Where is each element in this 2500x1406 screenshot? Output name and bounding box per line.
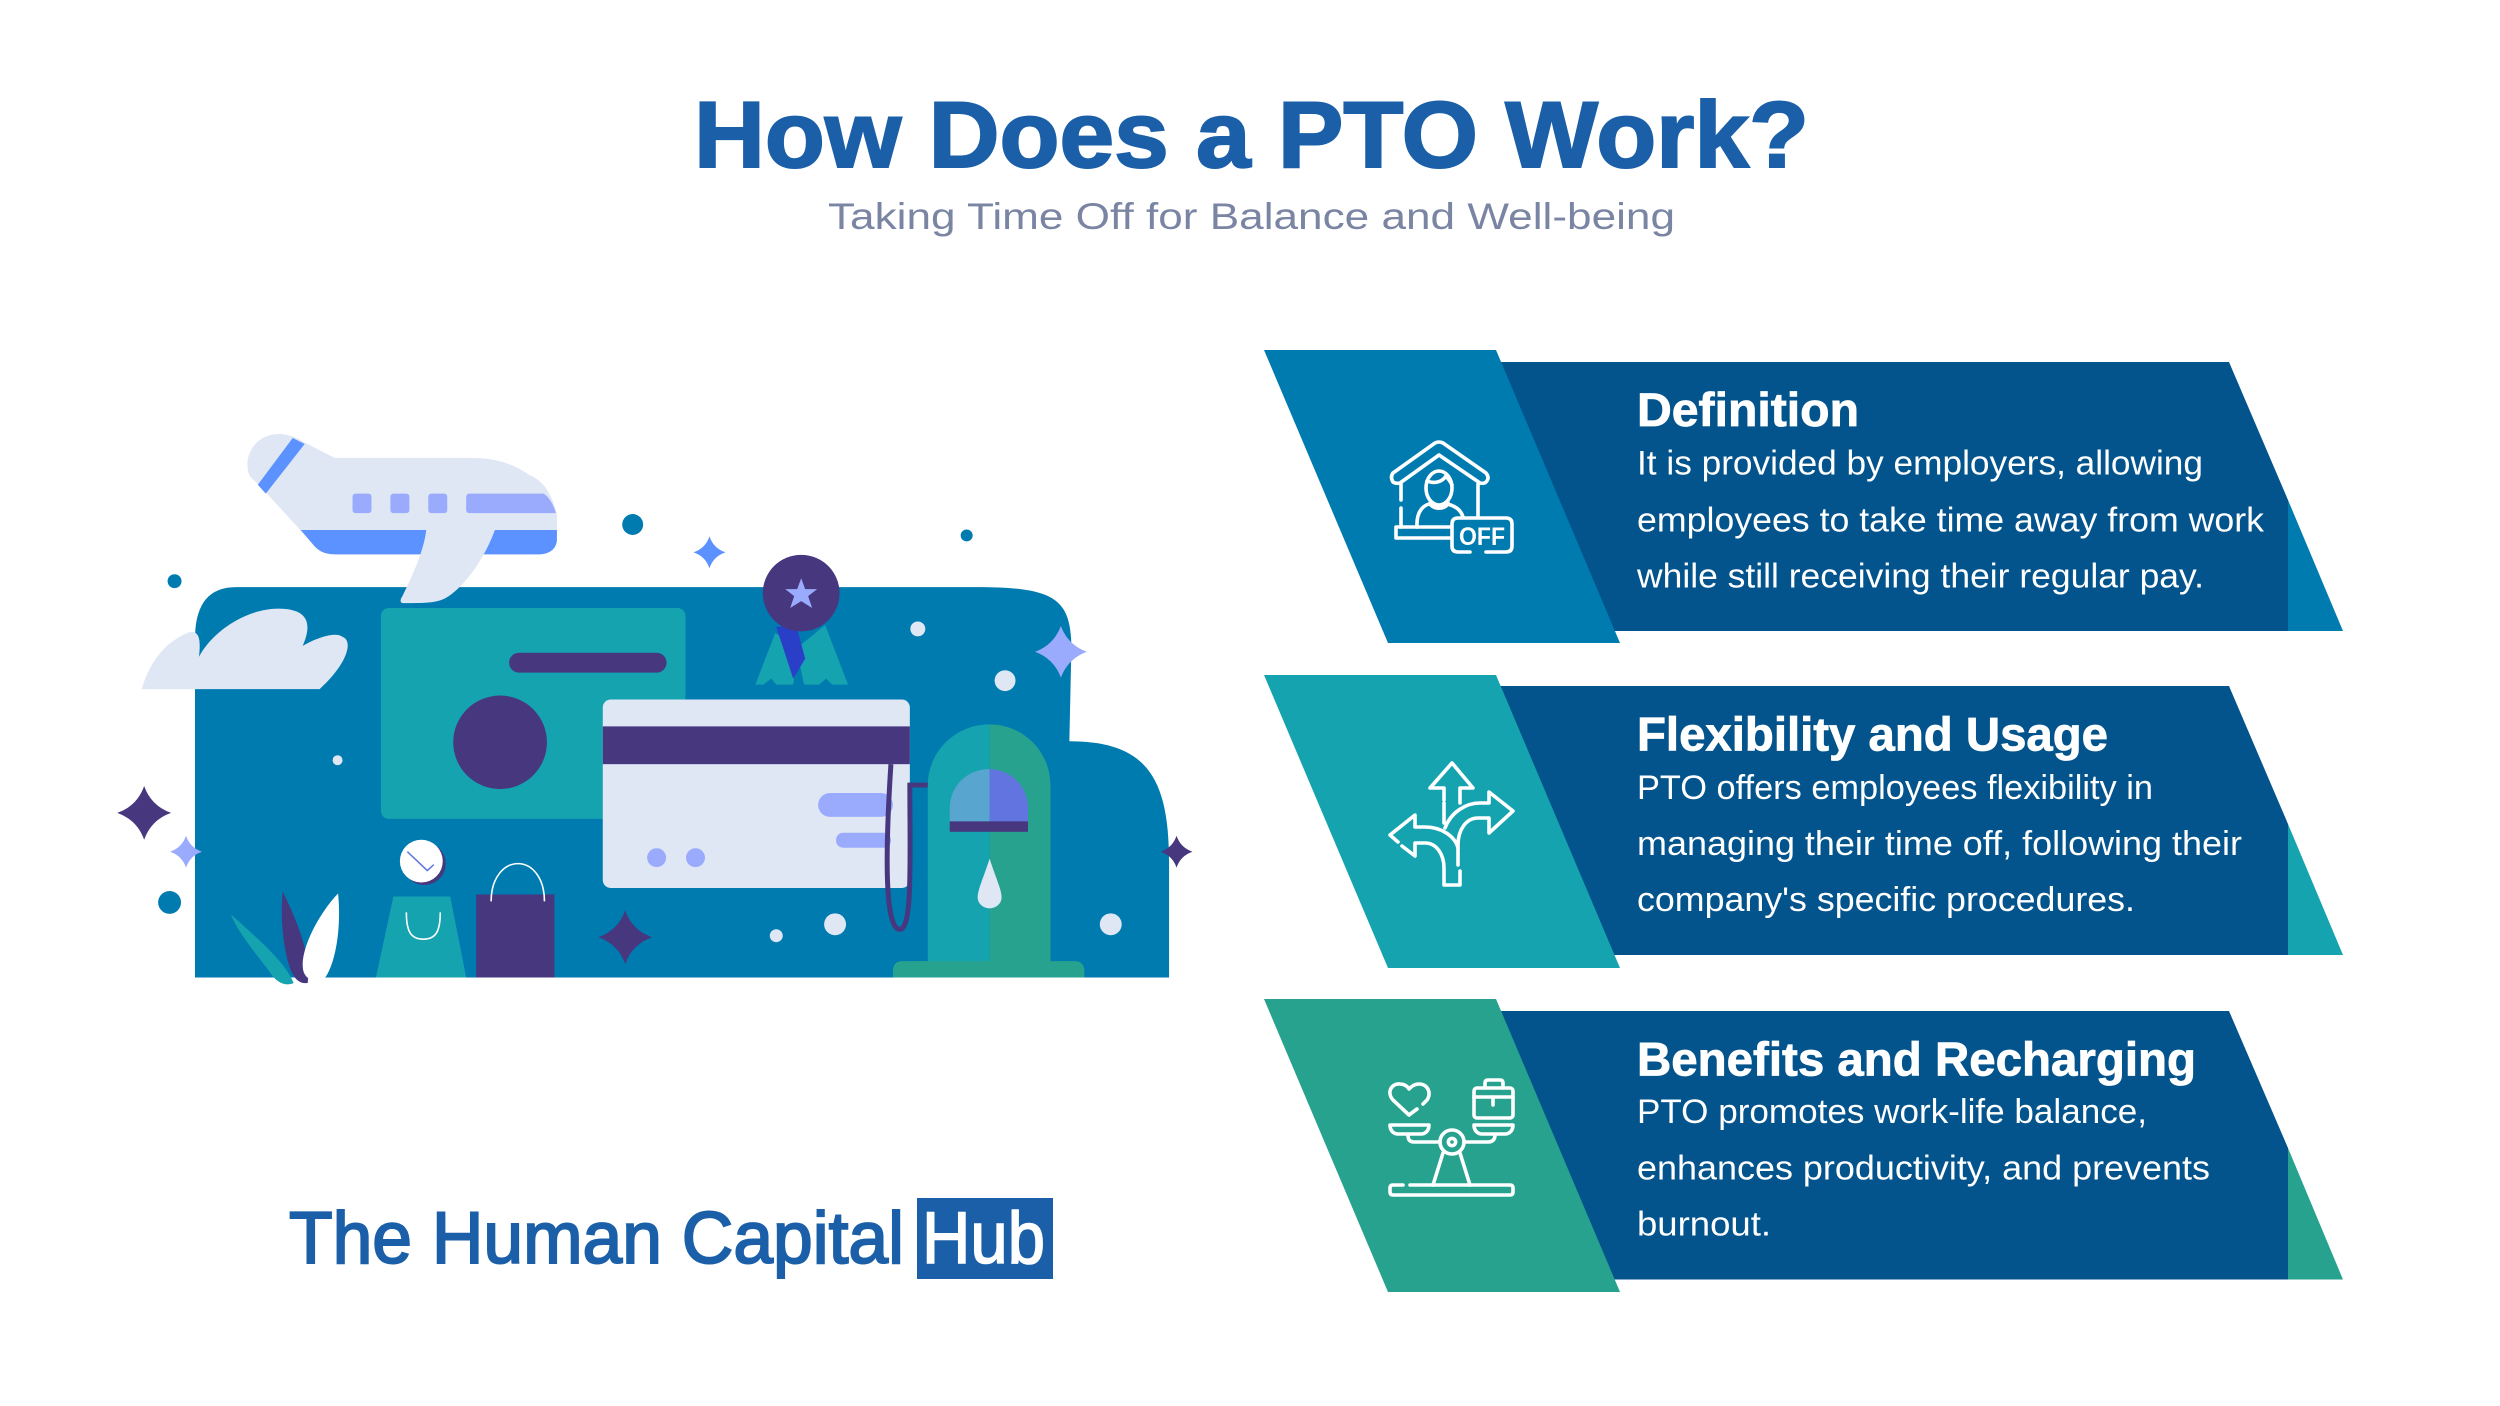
icon label: OFF: OFF <box>1459 523 1505 551</box>
body text: company's specific procedures. <box>1637 881 2135 919</box>
heading: Benefits and Recharging <box>1637 1032 2196 1086</box>
icon: teal shopping bag <box>376 896 466 977</box>
icon: work-life balance scale <box>1390 1080 1513 1195</box>
panel tab <box>1264 999 1620 1292</box>
panel body <box>1490 362 2288 631</box>
panel body <box>1490 686 2288 955</box>
icon: airplane <box>247 434 557 603</box>
panel tab <box>1264 675 1620 968</box>
body text: managing their time off, following their <box>1637 825 2242 863</box>
sparkles <box>117 536 1192 964</box>
body text: PTO offers employees flexibility in <box>1637 769 2153 807</box>
panel: definition <box>1264 350 2343 643</box>
subtitle: Taking Time Off for Balance and Well-being <box>828 196 1675 237</box>
icon: credit card <box>603 700 910 888</box>
icon: cloud <box>142 609 348 689</box>
panel accent corner <box>2288 1148 2343 1280</box>
body text: while still receiving their regular pay. <box>1636 558 2204 596</box>
panel accent corner <box>2288 500 2343 631</box>
body text: burnout. <box>1637 1206 1771 1244</box>
body text: It is provided by employers, allowing <box>1637 444 2203 482</box>
panel accent corner <box>2288 824 2343 955</box>
heading: Flexibility and Usage <box>1637 708 2108 760</box>
background blob <box>195 587 1169 977</box>
illustration: vacation scene <box>117 434 1192 984</box>
panel body <box>1490 1011 2288 1280</box>
icon: plant leaves <box>231 891 339 984</box>
icon: branching arrows <box>1390 763 1513 885</box>
body text <box>1637 1093 2210 1244</box>
logo: The Human Capital Hub: Hub <box>922 1198 1045 1279</box>
body text: PTO promotes work-life balance, <box>1637 1093 2147 1131</box>
body text: employees to take time away from work <box>1637 502 2265 540</box>
icon: purple shopping bag <box>476 864 554 977</box>
panel: flexibility and usage <box>1264 675 2343 968</box>
icon: fuel pump hose <box>887 764 930 929</box>
icon: passport card <box>381 608 686 819</box>
body text: enhances productivity, and prevents <box>1637 1150 2210 1188</box>
panel tab <box>1264 350 1620 643</box>
title: How Does a PTO Work? <box>694 82 1809 187</box>
panel: benefits and recharging <box>1264 999 2343 1292</box>
decorative dots <box>158 514 1122 942</box>
icon: fuel pump <box>893 724 1084 977</box>
body text <box>1637 769 2242 919</box>
icon: medal with ribbon <box>755 555 848 685</box>
body text <box>1636 444 2265 596</box>
icon: house with OFF sign <box>1392 442 1512 552</box>
heading: Definition <box>1637 383 1859 436</box>
icon: clock <box>400 840 446 885</box>
logo: The Human Capital Hub: The Human Capital <box>289 1198 904 1279</box>
